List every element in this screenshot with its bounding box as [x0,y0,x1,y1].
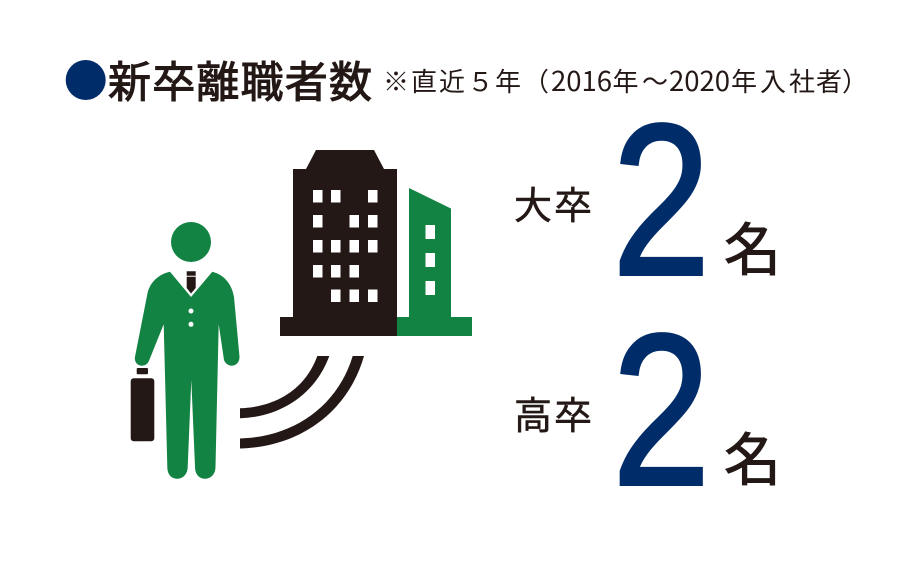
green building windows [426,225,435,295]
necktie [187,271,196,294]
suit buttons [188,308,194,327]
subtitle note: 直 [411,62,437,99]
subtitle note: ） [842,62,868,99]
subtitle note: 年 [495,62,521,99]
unit: 名 [724,205,781,287]
stat: university graduates [514,79,781,320]
arrow: curved lines from building to worker [240,356,364,448]
unit: 名 [724,415,781,497]
title: 新卒離職者数 [108,48,372,110]
icon: office buildings [280,150,472,336]
subtitle note: ５ [468,62,494,99]
icon: office worker with briefcase [131,222,240,479]
subtitle note: 入 [760,62,786,99]
label: 高卒 [514,385,592,440]
stat: high school graduates [514,289,781,530]
subtitle note: （ [523,62,549,99]
subtitle note: 年 [612,62,639,99]
subtitle note: 近 [439,62,465,99]
head [171,222,211,262]
subtitle note: 者 [816,62,842,99]
dark building windows [313,190,378,302]
suit body [135,272,240,479]
number: 2 [612,79,710,320]
subtitle note: ～ [642,62,668,99]
icon: heading bullet [66,60,106,100]
subtitle note: 年 [731,62,757,99]
green building [397,188,472,336]
heading [66,48,868,110]
subtitle note: 2016 [551,59,612,99]
label: 大卒 [514,175,592,230]
dark building [280,150,397,336]
number: 2 [612,289,710,530]
subtitle note: 2020 [669,59,730,99]
subtitle note: ※ [383,62,409,99]
subtitle note: 社 [789,62,815,99]
briefcase [131,368,154,441]
